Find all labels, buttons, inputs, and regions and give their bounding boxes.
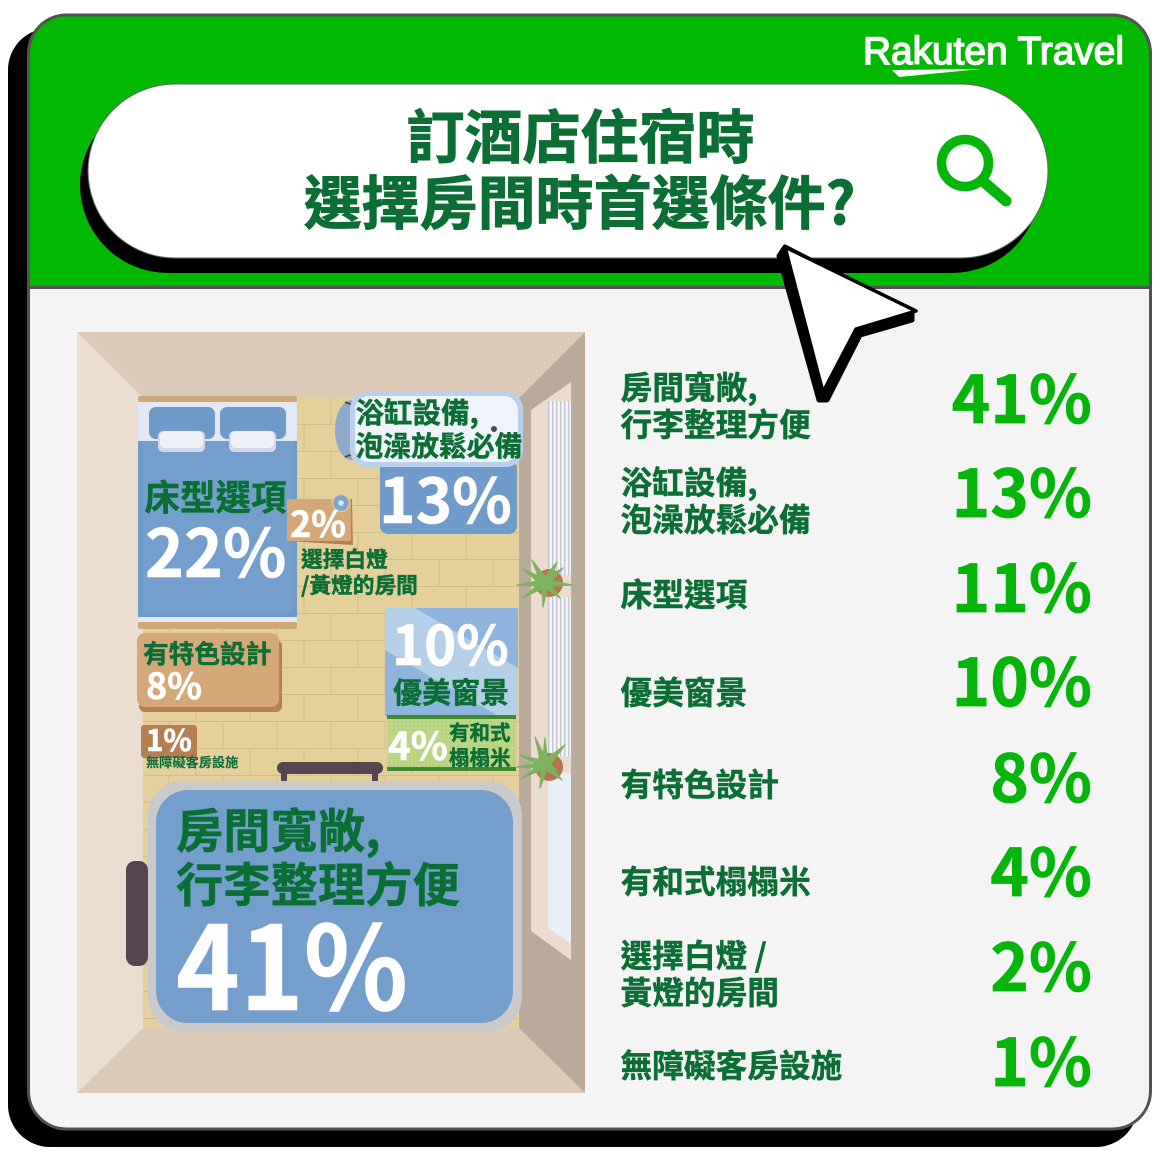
title: 訂酒店住宿時	[406, 91, 755, 175]
suitcase top handle	[277, 762, 383, 782]
suitcase: 41%: 行李整理方便	[176, 847, 460, 916]
row: 41%: 41%	[952, 347, 1092, 442]
top wall	[77, 332, 585, 398]
tatami: 4%: 有和式	[449, 716, 511, 746]
row: 8%: 有特色設計	[620, 760, 779, 806]
suitcase side handle	[126, 861, 148, 966]
left wall	[77, 332, 143, 1093]
row: 10%: 優美窗景	[620, 668, 747, 714]
suitcase: 41%: 房間寬敞,	[176, 793, 381, 862]
title: 選擇房間時首選條件?	[304, 157, 855, 241]
rug: 8%: 8%	[146, 658, 202, 710]
row: 2%: 2%	[990, 915, 1092, 1010]
floor bricks	[143, 398, 519, 1028]
plant: upper	[517, 560, 572, 607]
row: 41%	[620, 347, 1092, 446]
row: 8%: 8%	[990, 726, 1092, 821]
row: 13%: 浴缸設備,	[620, 458, 758, 504]
row: 10%: 10%	[952, 630, 1092, 725]
ranking list	[620, 347, 1092, 1105]
tatami: 4%: 4%	[388, 716, 448, 772]
bed: 22%	[138, 396, 297, 629]
row: 1%: 1%	[990, 1010, 1092, 1105]
bottom wall	[77, 1028, 585, 1093]
room floor plan	[77, 332, 585, 1093]
row: 13%: 13%	[952, 441, 1092, 536]
row: 13%: 泡澡放鬆必備	[620, 495, 811, 541]
rug: 8%: 有特色設計	[143, 634, 271, 671]
cursor arrow	[779, 247, 916, 400]
bathtub: 13%: 泡澡放鬆必備	[356, 425, 522, 465]
row: 8%	[620, 726, 1092, 821]
window view: 10%	[385, 602, 518, 716]
bathtub: 13%	[335, 391, 523, 541]
bathtub: 13%: 浴缸設備,	[356, 391, 479, 432]
row: 41%: 房間寬敞,	[620, 363, 758, 409]
window view: 10%: 10%	[392, 602, 509, 681]
title	[304, 91, 855, 241]
icon: magnifying glass	[942, 140, 1006, 201]
row: 1%	[620, 1010, 1092, 1105]
search bar	[80, 84, 1048, 273]
suitcase: 41%	[126, 762, 522, 1044]
row: 1%: 無障礙客房設施	[620, 1041, 842, 1087]
window view: 10%: 優美窗景	[393, 670, 509, 712]
rug: 8%	[137, 633, 282, 712]
suitcase: 41%: 41%	[176, 876, 408, 1044]
row: 2%	[620, 915, 1092, 1014]
row: 13%	[620, 441, 1092, 541]
row: 10%	[620, 630, 1092, 725]
row: 11%: 床型選項	[620, 570, 748, 616]
bed: 22%: 床型選項	[144, 470, 287, 521]
lamp: 2%: /黃燈的房間	[301, 569, 418, 600]
tatami: 4%	[387, 715, 516, 772]
row: 4%: 有和式榻榻米	[620, 857, 811, 903]
logo: Rakuten Travel: Rakuten Travel	[863, 30, 1124, 73]
row: 4%	[620, 820, 1092, 915]
row: 2%: 黃燈的房間	[620, 968, 779, 1014]
plant: lower	[517, 737, 565, 788]
row: 2%: 選擇白燈 /	[620, 931, 767, 977]
tatami: 4%: 榻榻米	[449, 741, 510, 771]
lamp: 2%: 選擇白燈	[301, 543, 388, 574]
right wall	[519, 332, 585, 1093]
window	[519, 382, 571, 960]
lamp: 2%	[287, 494, 418, 600]
box: 1%: 1%	[146, 718, 192, 760]
box: 1%: 無障礙客房設施	[146, 752, 238, 771]
bathtub: 13%: 13%	[379, 451, 512, 541]
header band	[28, 15, 1150, 287]
row: 4%: 4%	[990, 820, 1092, 915]
lamp: 2%: 2%	[290, 496, 346, 548]
box: 1%	[141, 718, 238, 771]
row: 11%: 11%	[952, 536, 1092, 631]
row: 11%	[620, 536, 1092, 631]
row: 41%: 行李整理方便	[620, 400, 811, 446]
bed: 22%: 22%	[145, 501, 286, 597]
